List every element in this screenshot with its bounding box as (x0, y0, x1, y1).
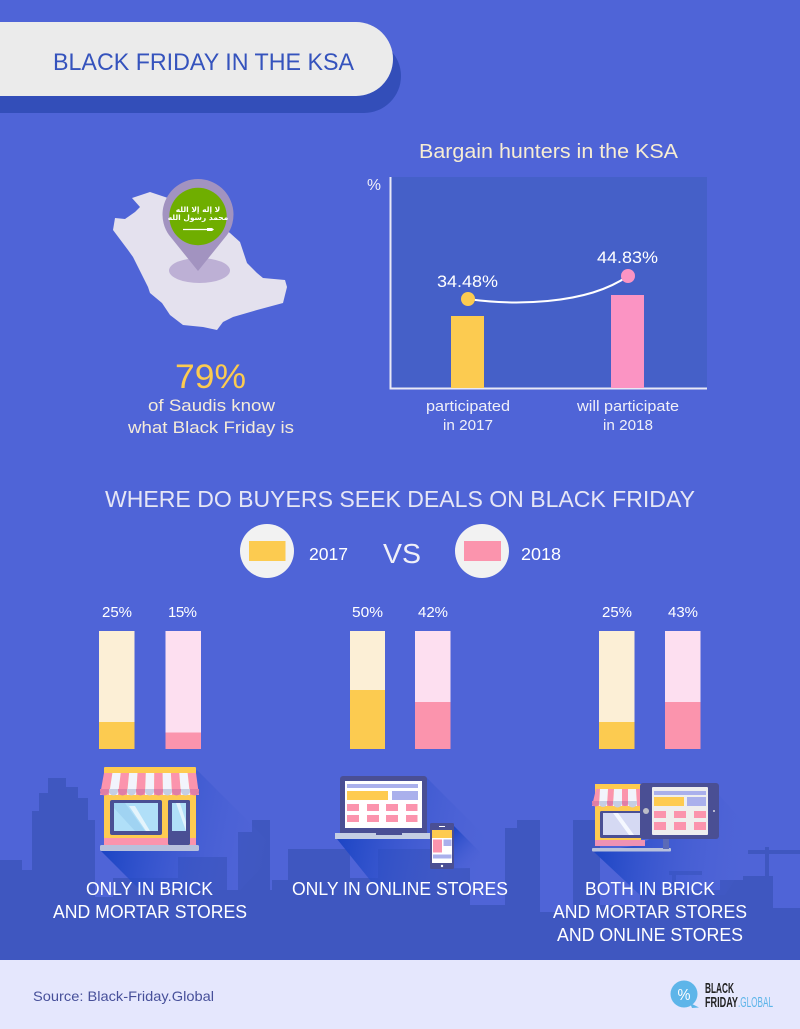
bar: online 2017: 50% (352, 604, 383, 621)
footer (0, 960, 800, 1029)
icon: location pin with flag (163, 179, 234, 283)
logo: BLACK (705, 980, 734, 997)
label: brick and mortar: ONLY IN BRICK (86, 878, 214, 899)
stat: 79%: 79% (175, 358, 246, 396)
source note: Source: Black-Friday.Global (33, 988, 214, 1004)
icon: location pin with flag: لا إله إلا الله (176, 205, 220, 214)
header banner (0, 22, 401, 113)
bar: brick 2018: 15% (168, 604, 197, 621)
section heading: WHERE DO BUYERS SEEK DEALS ON BLACK FRIDAY (105, 486, 695, 512)
chart axes (390, 177, 707, 388)
icon: storefront (100, 767, 278, 890)
panel: Saudi awareness (113, 179, 294, 437)
bars: online (350, 604, 450, 749)
bar: online 2018 (415, 604, 450, 749)
trend curve (468, 276, 628, 302)
x label: 2018: will participate (576, 399, 679, 415)
x label: 2018: in 2018 (603, 418, 653, 434)
stat caption (127, 396, 294, 437)
stat caption: of Saudis know (148, 396, 276, 415)
title: BLACK FRIDAY IN THE KSA (53, 49, 354, 76)
bar: both 2017: 25% (602, 604, 632, 621)
bar: online 2017 (350, 604, 385, 749)
axis unit: % (367, 177, 381, 194)
point: 2017 (461, 292, 475, 306)
legend: 2018 (455, 524, 561, 578)
legend: VS: VS (383, 538, 421, 569)
bar: brick 2017: 25% (102, 604, 132, 621)
map of Saudi Arabia (113, 192, 287, 330)
legend (240, 524, 561, 578)
bar: both 2018 (665, 604, 700, 749)
chart title: Bargain hunters in the KSA (419, 141, 679, 163)
value: 44.83%: 44.83% (597, 248, 658, 267)
icon: store and tablet (592, 783, 760, 895)
x label: 2017: participated (426, 399, 510, 415)
point: 2018 (621, 269, 635, 283)
bar: both 2018: 43% (668, 604, 698, 621)
logo: % (678, 987, 690, 1004)
label: brick and mortar (53, 878, 247, 922)
logo (670, 980, 773, 1011)
bars: both (599, 604, 700, 749)
bar: 2018 (611, 295, 644, 388)
x label: 2017: in 2017 (443, 418, 493, 434)
label: both: AND ONLINE STORES (557, 924, 743, 945)
logo: FRIDAY (705, 994, 738, 1011)
bars: brick and mortar (99, 604, 201, 749)
x label: 2017 (426, 399, 510, 434)
bar: brick 2017 (99, 604, 134, 749)
label: both (553, 878, 747, 945)
legend: 2018: 2018 (521, 544, 561, 564)
bar: brick 2018 (166, 604, 201, 749)
bar: 2017 (451, 316, 484, 388)
label: both: BOTH IN BRICK (585, 878, 716, 899)
value: 34.48%: 34.48% (437, 272, 498, 291)
label: online: ONLY IN ONLINE STORES (292, 878, 508, 899)
label: brick and mortar: AND MORTAR STORES (53, 901, 247, 922)
x label: 2018 (576, 399, 679, 434)
legend: 2017 (240, 524, 348, 578)
skyline backdrop (0, 778, 800, 960)
panel: bargain hunters chart (367, 141, 707, 434)
chart plot area (391, 177, 707, 388)
label: both: AND MORTAR STORES (553, 901, 747, 922)
bar: online 2018: 42% (418, 604, 448, 621)
icon: laptop and phone (335, 776, 500, 890)
legend: 2017: 2017 (309, 544, 348, 564)
bar: both 2017 (599, 604, 634, 749)
icon: location pin with flag: محمد رسول الله (168, 213, 229, 222)
stat caption: what Black Friday is (127, 418, 294, 437)
